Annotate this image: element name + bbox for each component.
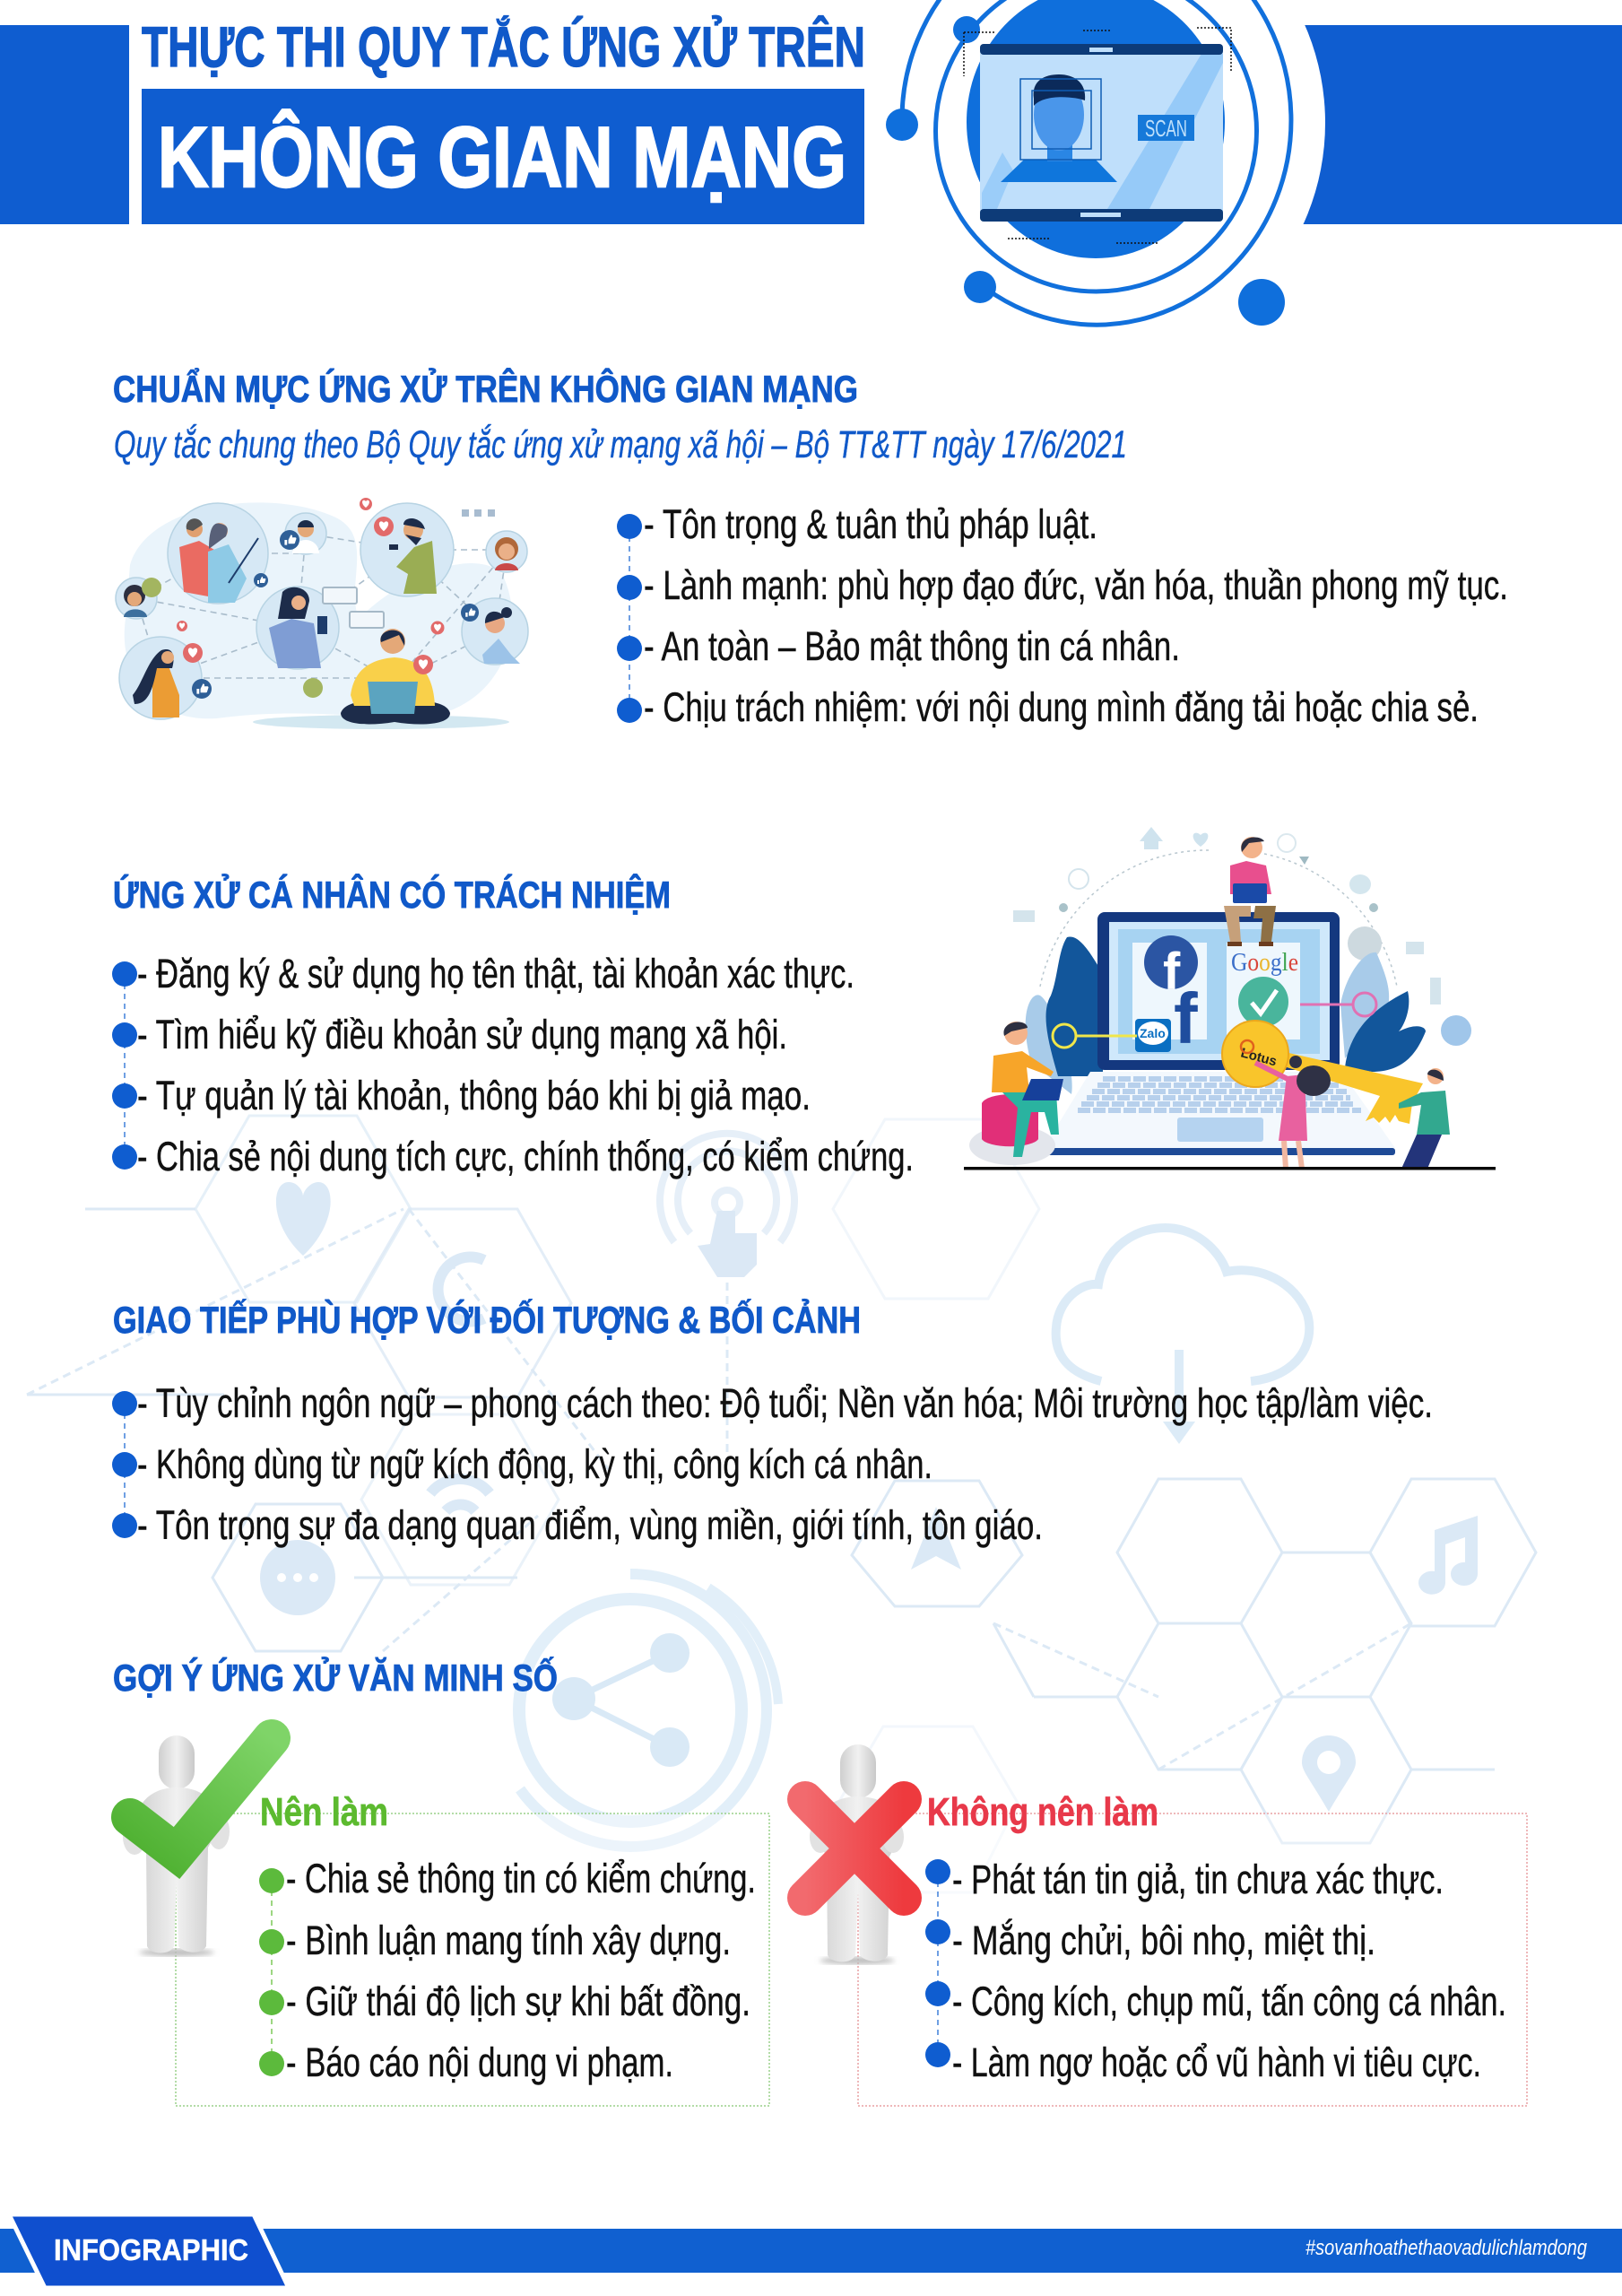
connector key rings <box>1053 993 1376 1048</box>
watermark icon: music note <box>1418 1516 1478 1595</box>
dotted measure marks <box>964 28 1231 243</box>
icon: face scan tablet with rings <box>866 0 1325 361</box>
icon: zalo <box>1135 1019 1171 1052</box>
do-not bullets <box>925 1857 1506 2085</box>
watermark icon: touch signal <box>660 1134 794 1277</box>
do bullets: - Báo cáo nội dung vi phạm. <box>286 2039 673 2085</box>
section 2 heading: ỨNG XỬ CÁ NHÂN CÓ TRÁCH NHIỆM <box>113 873 671 916</box>
scan tag <box>1138 115 1194 142</box>
icon: verified check <box>1238 977 1288 1027</box>
figure with green check <box>123 1735 272 1956</box>
watermark icon: chat bubble <box>260 1540 335 1615</box>
do bullets <box>259 1856 756 2085</box>
list: section 2 bullets: - Chia sẻ nội dung tích cực, chính thống, có kiểm chứng. <box>137 1134 914 1179</box>
man with laptop on stool <box>969 1022 1063 1165</box>
icon: zalo: Zalo <box>1140 1026 1166 1040</box>
pale background icons <box>1013 827 1441 1004</box>
header band right <box>1166 25 1622 224</box>
share badges <box>142 578 323 698</box>
title line 1: THỰC THI QUY TẮC ỨNG XỬ TRÊN <box>142 15 865 79</box>
footer band <box>0 2214 1622 2288</box>
person woman with hair bun <box>482 607 520 664</box>
list: section 2 bullets: - Đăng ký & sử dụng họ tên thật, tài khoản xác thực. <box>137 951 854 996</box>
watermark icon: star badge <box>911 1507 961 1570</box>
man with laptop in yellow shirt <box>341 629 450 725</box>
menu dots <box>462 509 495 517</box>
golden key with Lotus <box>1222 1021 1423 1124</box>
watermark icon: sync arrow <box>438 1257 484 1322</box>
couple taking selfie <box>179 518 258 603</box>
title line 2: KHÔNG GIAN MẠNG <box>158 109 846 205</box>
man top centre <box>292 520 319 553</box>
list: section 1 bullets: - Tôn trọng & tuân thủ pháp luật. <box>644 501 1097 547</box>
icon: small facebook f: f <box>1174 978 1198 1058</box>
footer tab <box>9 2214 289 2288</box>
icon: facebook circle: f <box>1163 943 1181 1001</box>
like badges <box>192 530 479 699</box>
scan tag: SCAN <box>1145 115 1187 142</box>
header band left <box>0 25 129 224</box>
footer tab label: INFOGRAPHIC <box>54 2233 248 2266</box>
bearded man with phone <box>389 518 437 594</box>
watermark icon: share circle <box>519 1574 778 1847</box>
comment bubbles <box>323 587 384 628</box>
man sitting on laptop <box>1224 837 1276 946</box>
ground line <box>964 1167 1496 1170</box>
list: section 3 bullets <box>112 1380 1433 1548</box>
pale blue dot <box>1441 1015 1471 1046</box>
list: section 1 bullets: - An toàn – Bảo mật thông tin cá nhân. <box>644 623 1180 669</box>
list: section 3 bullets: - Không dùng từ ngữ kích động, kỳ thị, công kích cá nhân. <box>137 1441 932 1487</box>
man in green <box>1399 1068 1450 1169</box>
woman with ponytail <box>133 649 179 718</box>
watermark icon: map pin <box>1302 1735 1356 1812</box>
figure with red cross <box>805 1744 904 1964</box>
panel: do <box>123 1735 769 2106</box>
do bullets: - Bình luận mang tính xây dựng. <box>286 1918 731 1963</box>
section 4 heading: GỢI Ý ỨNG XỬ VĂN MINH SỐ <box>113 1656 558 1699</box>
woman left <box>124 585 147 617</box>
logo: google: Google <box>1231 948 1298 977</box>
illustration: social network people <box>116 498 528 729</box>
background watermark: hexagon network and icons <box>27 1116 1536 1892</box>
panel: do not <box>805 1744 1527 2106</box>
watermark icon: cloud download <box>1056 1228 1309 1444</box>
title box <box>142 89 864 224</box>
tablet screen <box>980 44 1223 222</box>
scanned person <box>1001 74 1117 182</box>
woman top right <box>495 537 518 570</box>
woman in pink <box>1255 1056 1331 1169</box>
golden key with Lotus: Lotus <box>1239 1045 1279 1069</box>
decorative leaves <box>1026 936 1426 1094</box>
do-not bullets: - Phát tán tin giả, tin chưa xác thực. <box>952 1857 1444 1902</box>
list: section 1 bullets <box>617 501 1508 730</box>
do bullets: - Giữ thái độ lịch sự khi bất đồng. <box>286 1979 750 2024</box>
section 1 heading: CHUẨN MỰC ỨNG XỬ TRÊN KHÔNG GIAN MẠNG <box>113 367 858 410</box>
section 3 heading: GIAO TIẾP PHÙ HỢP VỚI ĐỐI TƯỢNG & BỐI CẢNH <box>113 1298 861 1341</box>
do heading: Nên làm <box>260 1790 388 1834</box>
watermark icon: heart <box>276 1182 331 1256</box>
laptop base and keyboard <box>1044 1072 1395 1155</box>
list: section 3 bullets: - Tôn trọng sự đa dạng quan điểm, vùng miền, giới tính, tôn giáo. <box>137 1502 1043 1548</box>
section 1 subtitle: Quy tắc chung theo Bộ Quy tắc ứng xử mạng xã hội – Bộ TT&TT ngày 17/6/2021 <box>114 423 1127 466</box>
woman centre with phone <box>269 587 327 668</box>
do-not bullets: - Mắng chửi, bôi nhọ, miệt thị. <box>952 1918 1375 1963</box>
person circles <box>116 503 528 719</box>
do-not heading: Không nên làm <box>927 1790 1158 1834</box>
icon: facebook circle <box>1144 935 1198 1001</box>
list: section 2 bullets: - Tự quản lý tài khoản, thông báo khi bị giả mạo. <box>137 1073 811 1118</box>
laptop screen <box>1097 912 1340 1070</box>
watermark icon: wifi <box>430 1479 490 1511</box>
heart badges <box>177 498 445 674</box>
do bullets: - Chia sẻ thông tin có kiểm chứng. <box>286 1856 756 1901</box>
illustration: laptop, key and social accounts <box>964 827 1496 1170</box>
list: section 2 bullets <box>112 951 914 1179</box>
list: section 2 bullets: - Tìm hiểu kỹ điều khoản sử dụng mạng xã hội. <box>137 1012 787 1057</box>
